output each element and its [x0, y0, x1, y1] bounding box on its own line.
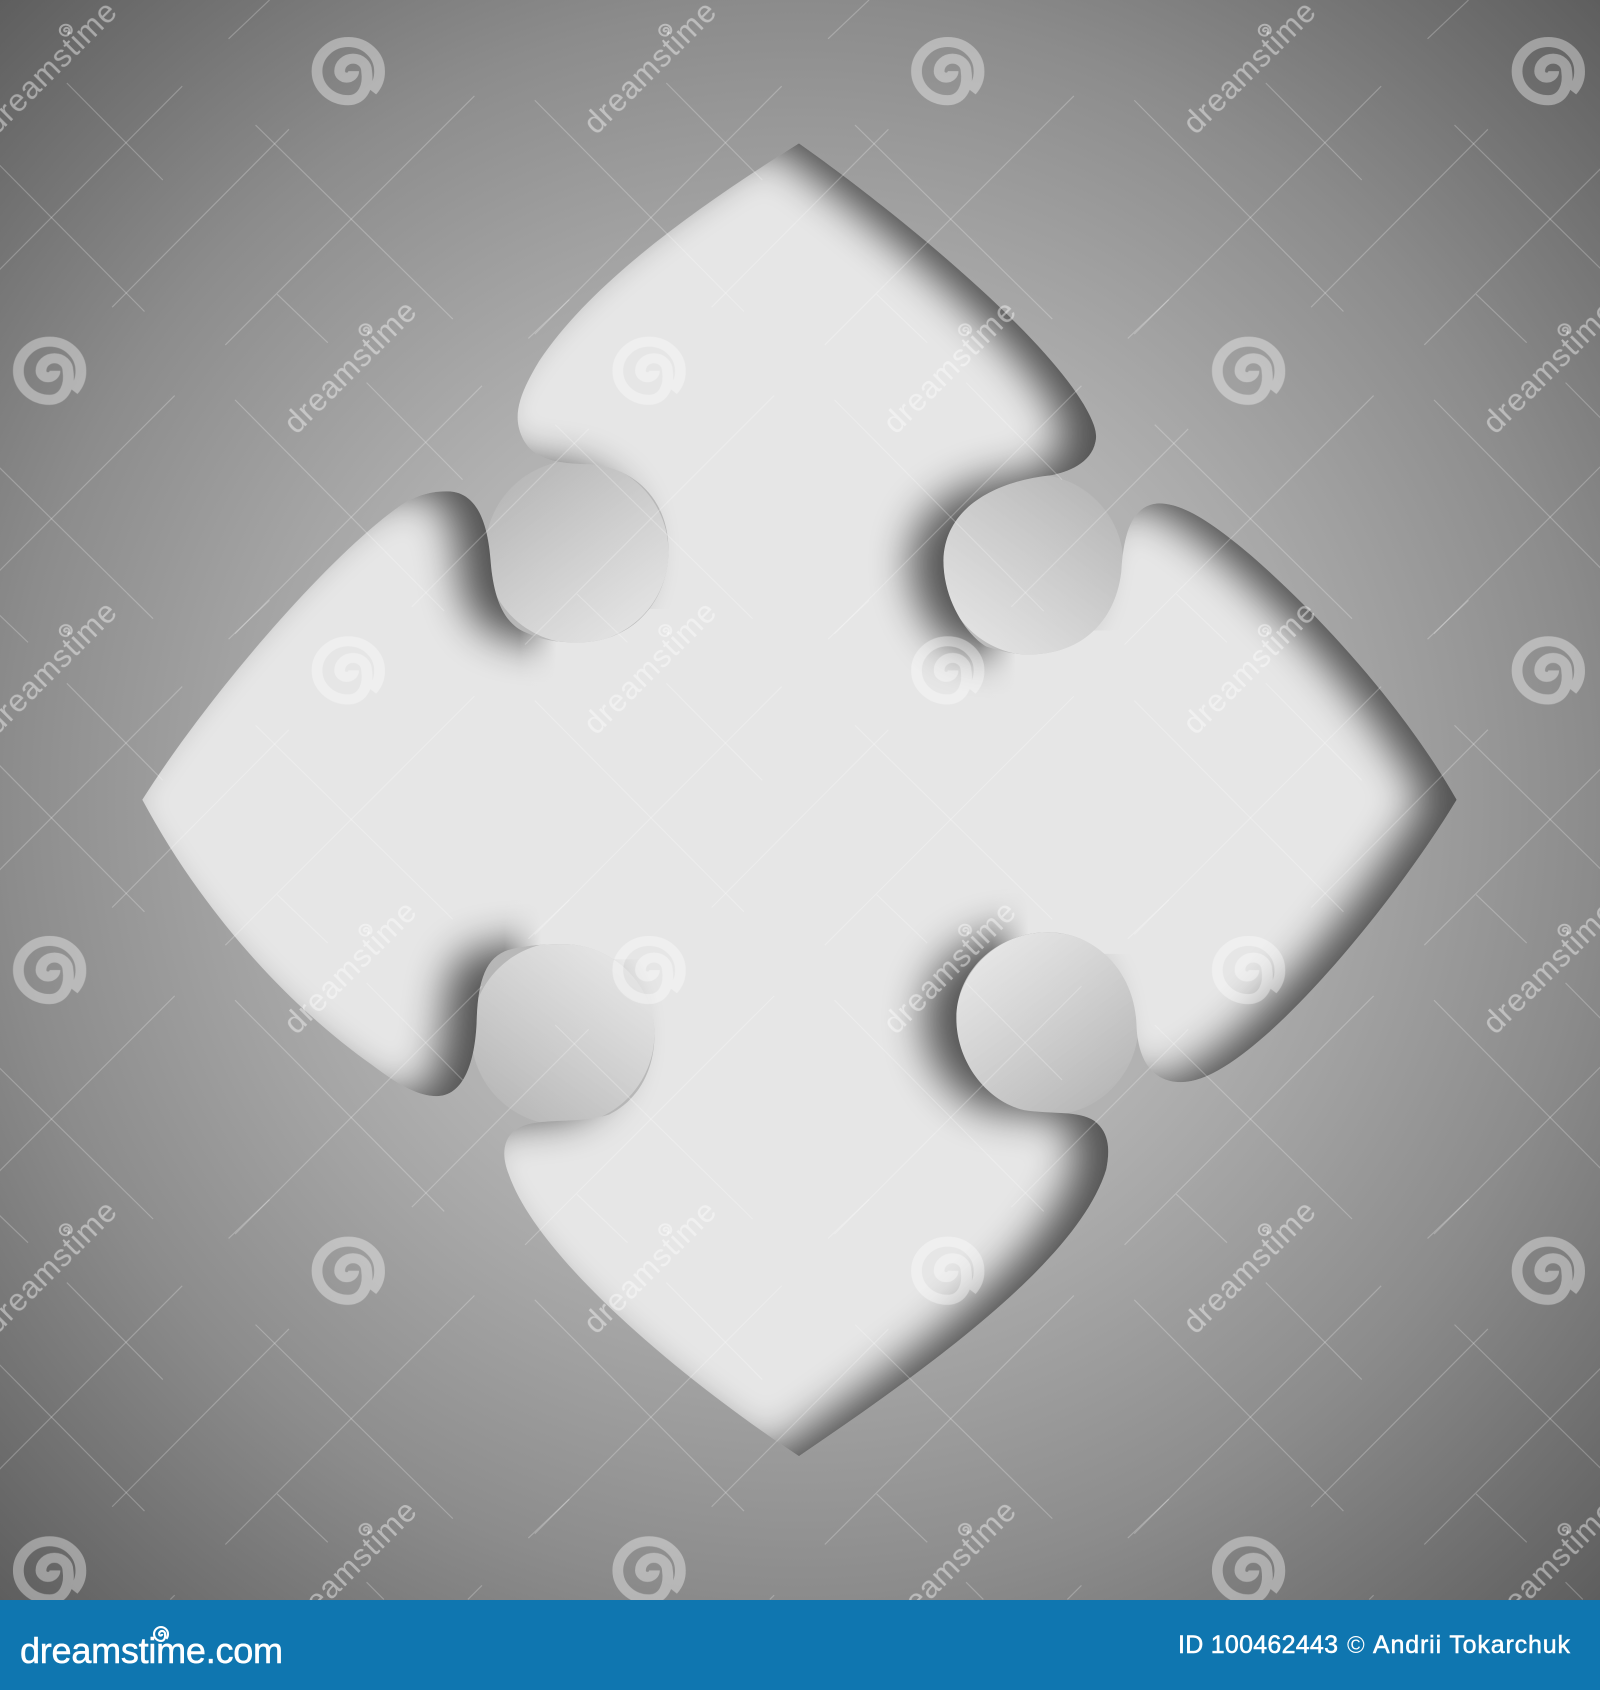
watermark text: dreamstime — [1176, 1194, 1323, 1340]
watermark text: dreamstime — [277, 1493, 423, 1640]
logo spiral — [154, 1627, 168, 1641]
watermark text: dreamstime — [876, 1493, 1023, 1640]
image id and author credit: © — [1347, 1632, 1365, 1659]
watermark text: dreamstime — [876, 894, 1023, 1041]
puzzle piece — [142, 143, 1457, 1456]
logo wordmark: dreamstime.com — [20, 1630, 283, 1671]
watermark text: dreamstime — [576, 594, 723, 741]
inner shadow on the piece — [142, 144, 1456, 1456]
watermark text: dreamstime — [576, 1194, 723, 1340]
watermark text: dreamstime — [1176, 594, 1323, 741]
socket circles — [471, 460, 1139, 1125]
watermark text: dreamstime — [876, 294, 1023, 440]
image id and author credit — [1178, 1631, 1570, 1659]
watermark text: dreamstime — [277, 294, 423, 440]
watermark text: dreamstime — [277, 894, 423, 1041]
footer banner — [0, 1600, 1600, 1690]
image id and author credit: Andrii Tokarchuk — [1373, 1631, 1570, 1659]
image id and author credit: ID 100462443 — [1178, 1631, 1338, 1659]
